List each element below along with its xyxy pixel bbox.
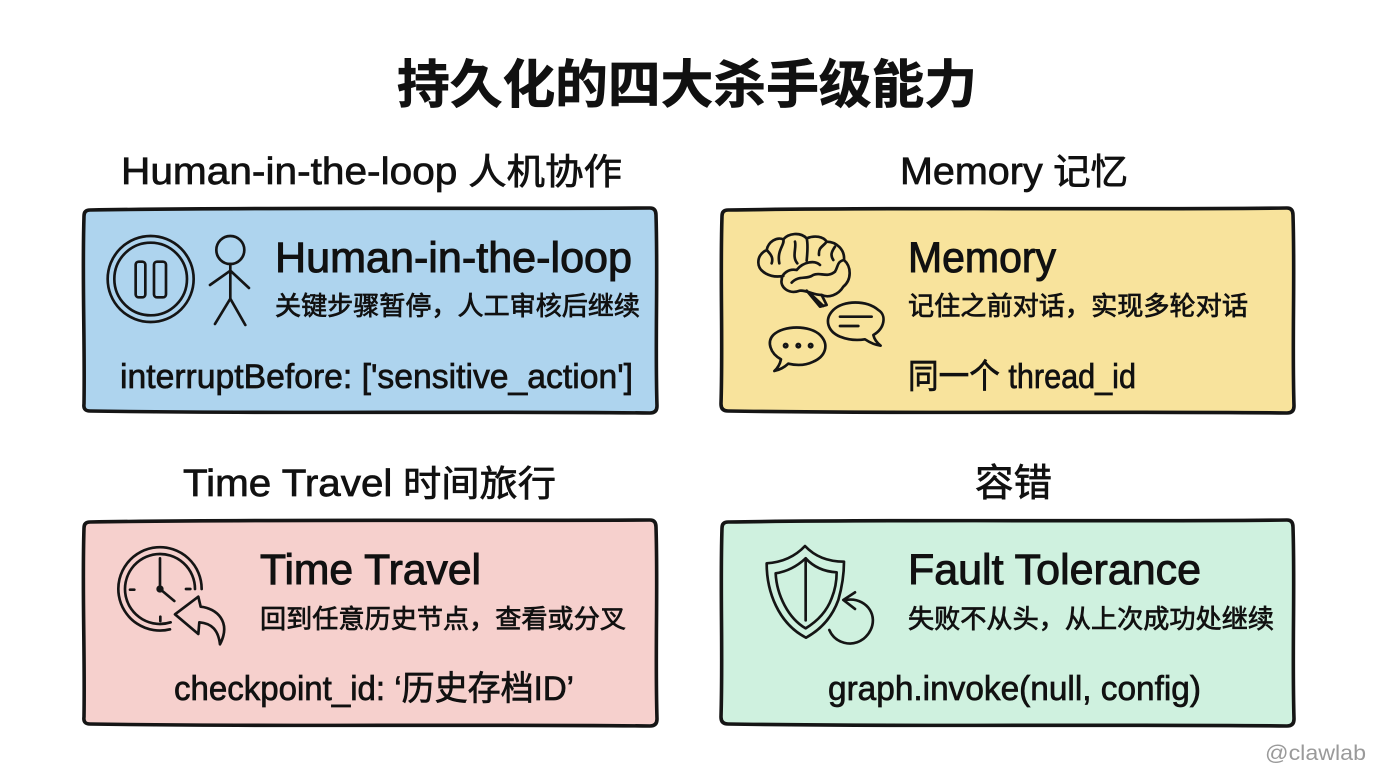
icon: speech bubble with lines xyxy=(828,302,884,346)
panel background: pink xyxy=(83,520,657,726)
heading: memory: Memory 记忆 xyxy=(900,151,1128,193)
panel: memory xyxy=(721,208,1294,413)
panel: time travel xyxy=(83,520,657,726)
panel description: 记住之前对话，实现多轮对话 xyxy=(908,291,1248,321)
panel: human-in-the-loop xyxy=(83,208,657,413)
heading: time travel: Time Travel 时间旅行 xyxy=(183,463,556,505)
panel description: 回到任意历史节点，查看或分叉 xyxy=(260,604,626,634)
icon: brain xyxy=(758,234,850,307)
watermark: @clawlab xyxy=(1265,742,1366,765)
code snippet: checkpoint_id: ‘历史存档ID’ xyxy=(174,670,574,708)
icon: pause button xyxy=(108,236,194,322)
icon: retry arrow xyxy=(829,592,873,643)
panel title: Fault Tolerance xyxy=(908,546,1201,594)
code snippet: interruptBefore: ['sensitive_action'] xyxy=(120,358,633,396)
title: 持久化的四大杀手级能力 xyxy=(397,57,977,115)
heading: fault tolerance: 容错 xyxy=(975,463,1052,505)
panel background: blue xyxy=(83,208,657,413)
panel: fault tolerance xyxy=(721,520,1294,726)
panel title: Time Travel xyxy=(260,546,481,594)
icon: clock with back arrow xyxy=(118,547,224,644)
icon: stick figure xyxy=(210,236,249,325)
panel description: 失败不从头，从上次成功处继续 xyxy=(908,604,1274,634)
icon: shield xyxy=(767,546,844,638)
heading: human-in-the-loop: Human-in-the-loop 人机协作 xyxy=(121,151,622,193)
panel title: Human-in-the-loop xyxy=(275,234,632,282)
code snippet: 同一个 thread_id xyxy=(908,358,1136,396)
code snippet: graph.invoke(null, config) xyxy=(828,670,1201,708)
panel description: 关键步骤暂停，人工审核后继续 xyxy=(275,291,640,321)
panel background: green xyxy=(721,520,1294,726)
panel title: Memory xyxy=(908,234,1056,282)
icon: speech bubble with dots xyxy=(770,327,825,371)
panel background: yellow xyxy=(721,208,1294,413)
